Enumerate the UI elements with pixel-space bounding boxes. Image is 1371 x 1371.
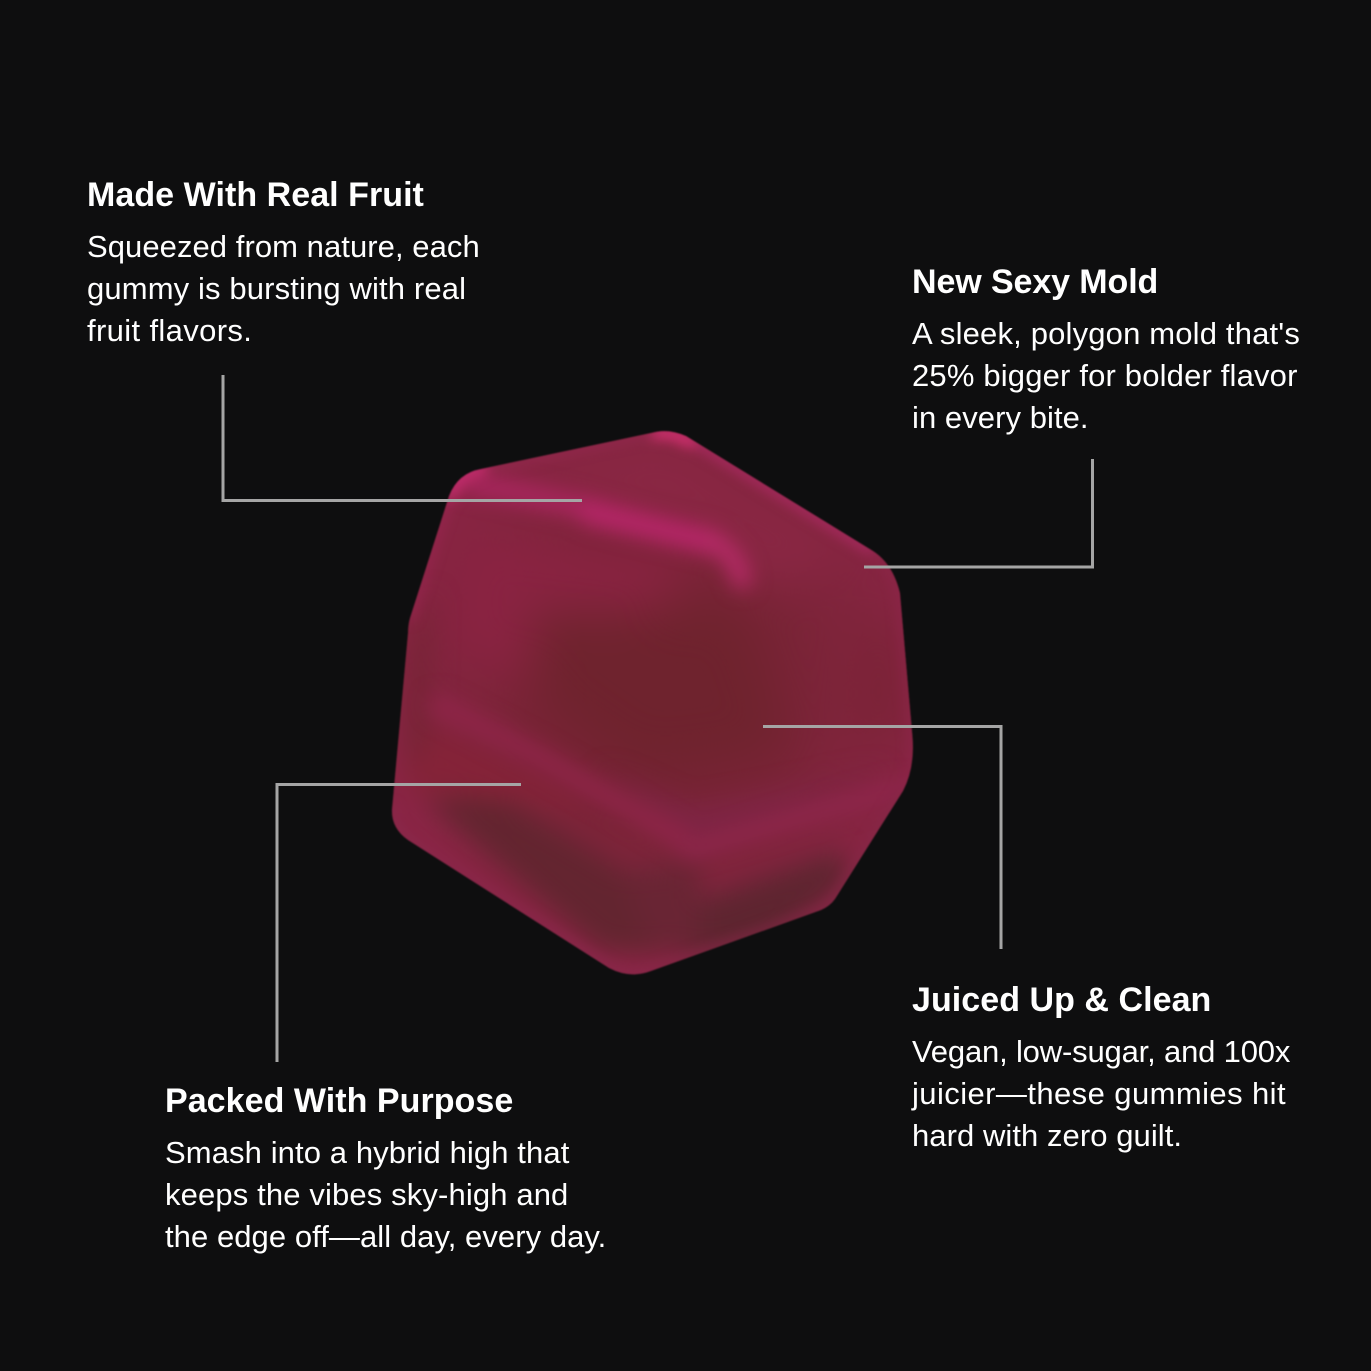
callout: made with real fruit xyxy=(87,176,480,348)
callout: made with real fruit: gummy is bursting with real xyxy=(87,271,466,306)
callout: packed with purpose: Smash into a hybrid high that xyxy=(165,1135,569,1170)
callout: new sexy mold xyxy=(912,263,1300,435)
lower ridges xyxy=(439,705,680,838)
top crease ridge xyxy=(470,483,588,508)
callout: made with real fruit: fruit flavors. xyxy=(87,313,252,348)
callout: juiced up and clean: Vegan, low-sugar, and 100x xyxy=(912,1034,1290,1069)
callout: packed with purpose xyxy=(165,1082,606,1254)
callout: new sexy mold: 25% bigger for bolder flavor xyxy=(912,358,1298,393)
callout: packed with purpose: the edge off—all day, every day. xyxy=(165,1219,606,1254)
callout: new sexy mold: A sleek, polygon mold that's xyxy=(912,316,1300,351)
callout: made with real fruit: Squeezed from nature, each xyxy=(87,229,480,264)
gummy illustration xyxy=(391,430,914,976)
callout: new sexy mold: New Sexy Mold xyxy=(912,263,1158,301)
gummy rim glow xyxy=(416,430,875,944)
callout: made with real fruit: Made With Real Fruit xyxy=(87,176,424,214)
callout: new sexy mold: in every bite. xyxy=(912,400,1089,435)
callout: packed with purpose: keeps the vibes sky-high and xyxy=(165,1177,568,1212)
callout: juiced up and clean: juicier—these gummies hit xyxy=(912,1076,1286,1111)
callout: packed with purpose: Packed With Purpose xyxy=(165,1082,513,1120)
callout: juiced up and clean: Juiced Up & Clean xyxy=(912,981,1211,1019)
callout: juiced up and clean xyxy=(911,981,1290,1153)
callout: juiced up and clean: hard with zero guilt. xyxy=(912,1118,1182,1153)
